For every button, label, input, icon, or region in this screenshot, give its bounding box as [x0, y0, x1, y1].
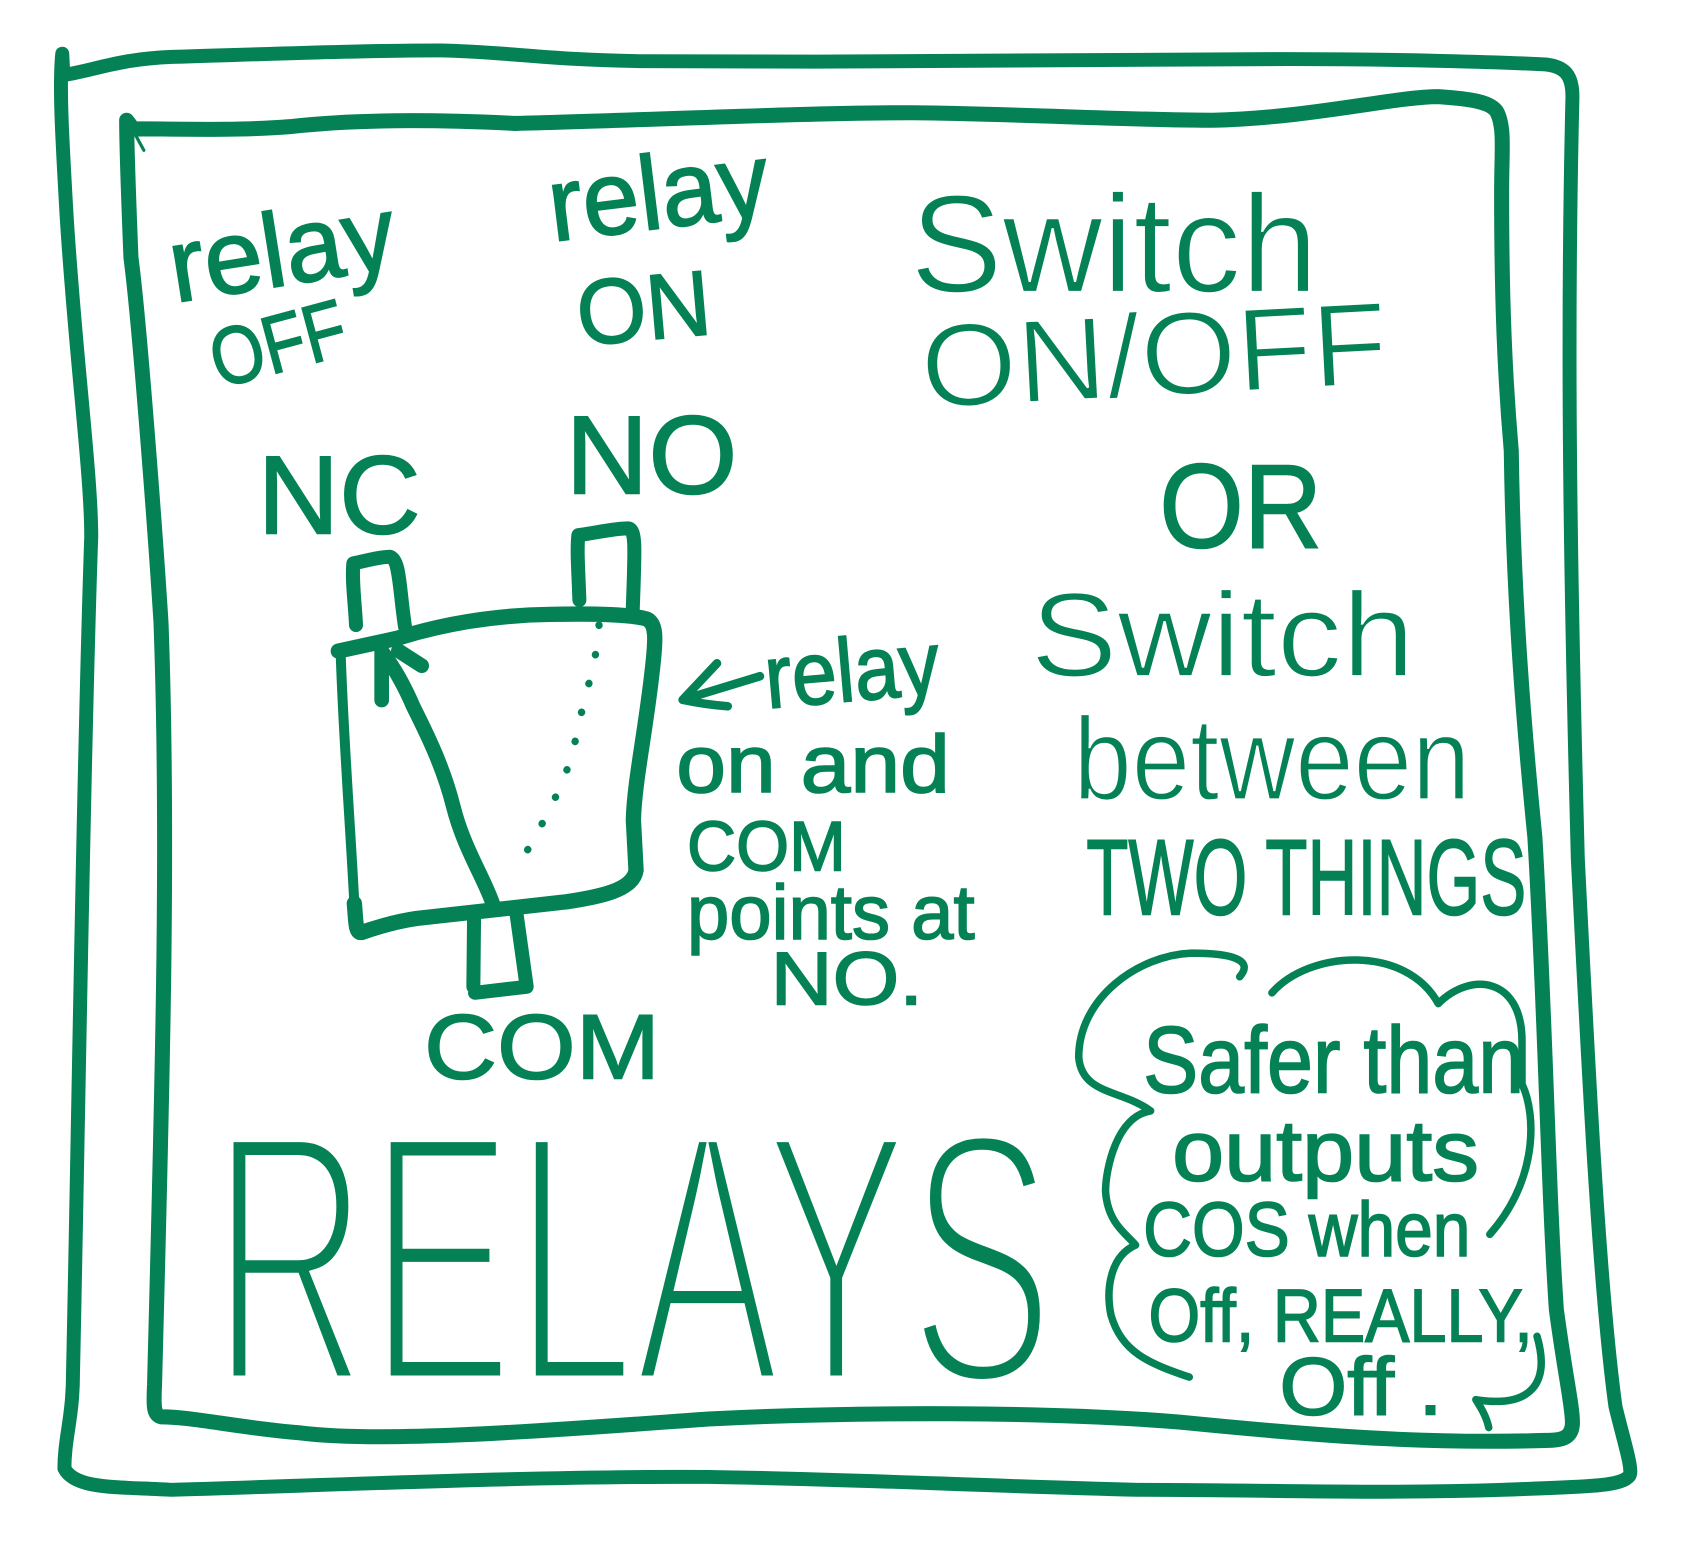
arrow to relay annotation — [683, 663, 760, 706]
label: switch between two things — [1030, 568, 1526, 937]
annotation: relay on and com points at NO: NO. — [771, 937, 923, 1021]
label: switch between two things: between — [1073, 694, 1470, 826]
label: NC terminal: NC — [258, 432, 421, 557]
COM pin — [473, 915, 527, 993]
callout cloud — [1079, 953, 1244, 1377]
relay body left edge — [341, 653, 354, 903]
annotation: relay on and com points at NO: COM — [687, 807, 846, 886]
NO pin — [578, 528, 634, 610]
label: relay on: ON — [572, 250, 715, 366]
relay diagram — [338, 528, 655, 993]
label: switch on/off: ON/OFF — [918, 278, 1391, 434]
callout cloud top right — [1272, 960, 1531, 1234]
annotation: relay on and com points at NO: relay — [760, 612, 943, 728]
callout text: safer than outputs: outputs — [1172, 1104, 1479, 1200]
label: switch on/off: Switch — [910, 166, 1318, 322]
relay body — [338, 614, 655, 932]
inner frame — [127, 97, 1572, 1441]
callout text: safer than outputs: Off, REALLY, — [1148, 1274, 1533, 1358]
callout text: safer than outputs: Safer than — [1143, 1008, 1524, 1114]
label: NO terminal: NO — [566, 393, 737, 518]
label: relay off — [160, 174, 404, 406]
callout text: safer than outputs: Off . — [1279, 1342, 1443, 1433]
annotation: relay on and com points at NO — [676, 612, 975, 1021]
label: relay on: relay — [541, 121, 775, 264]
label: OR: OR — [1159, 439, 1322, 573]
dotted line to NO — [515, 625, 599, 871]
arrow to NC — [382, 650, 493, 903]
label: relay off: relay — [160, 174, 404, 325]
label: relay off: OFF — [200, 282, 356, 406]
label: relay on — [541, 121, 775, 366]
callout text: safer than outputs — [1143, 1008, 1533, 1433]
NC pin — [353, 557, 405, 627]
annotation: relay on and com points at NO: points at — [687, 870, 975, 956]
annotation: relay on and com points at NO: on and — [676, 719, 950, 810]
label: COM terminal: COM — [424, 995, 660, 1099]
title: RELAYS — [211, 1057, 1054, 1459]
label: switch on/off — [910, 166, 1391, 434]
callout text: safer than outputs: COS when — [1143, 1187, 1470, 1273]
inner frame corner nick — [131, 127, 144, 150]
label: switch between two things: Switch — [1030, 568, 1415, 702]
callout tail — [1476, 1336, 1541, 1428]
